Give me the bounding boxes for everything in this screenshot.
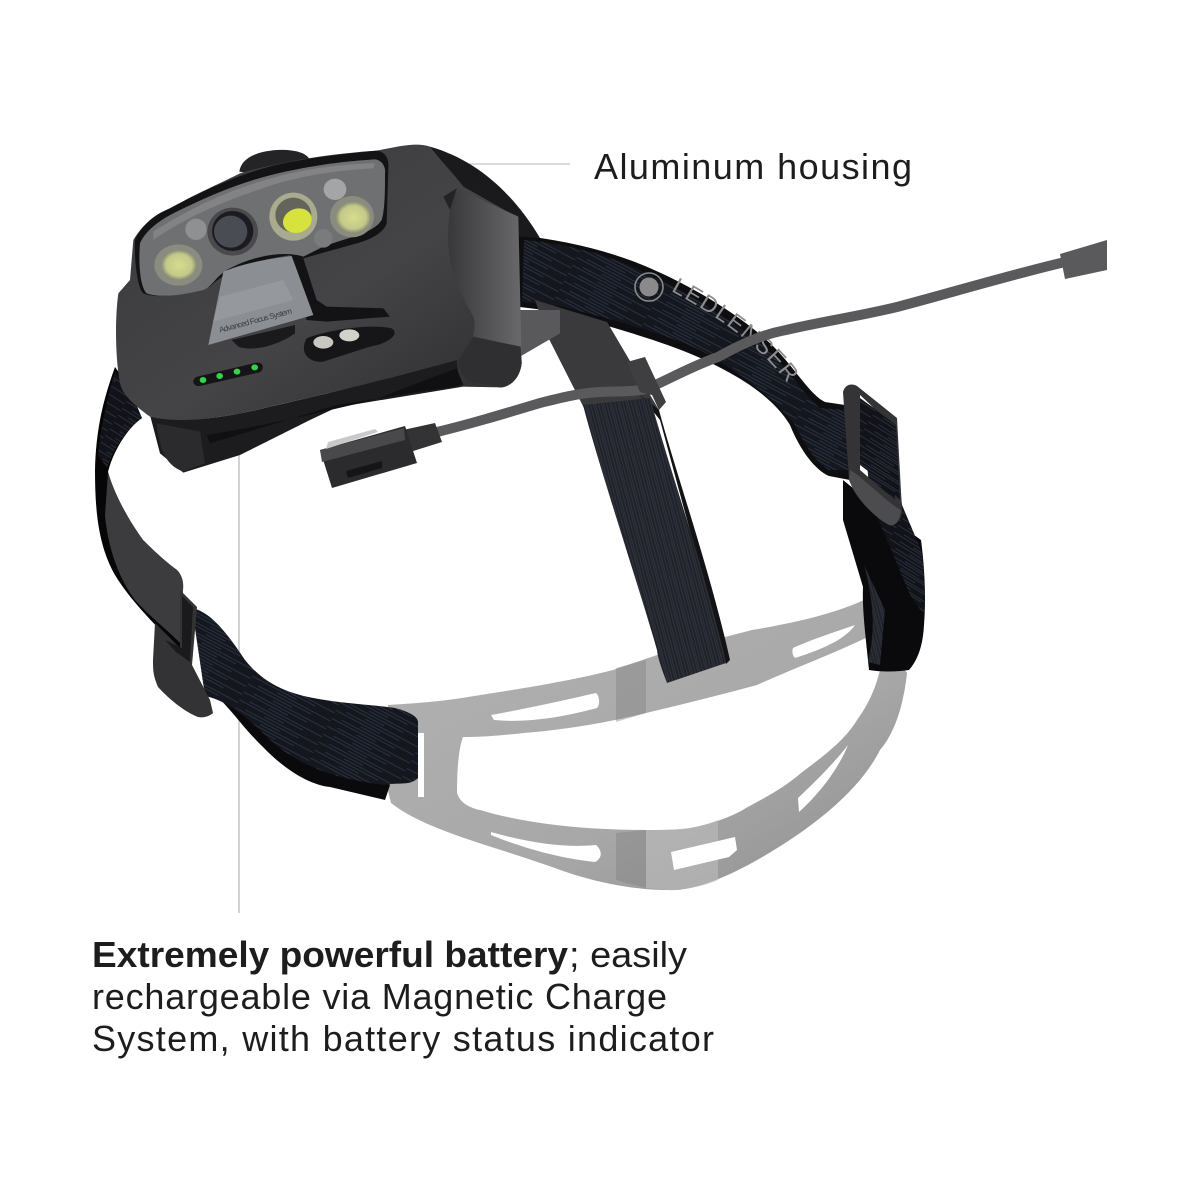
housing shell [116,145,522,420]
battery description text [92,934,714,1059]
switch panel [304,327,395,362]
cable strap slider [627,357,666,410]
focus wheel [232,325,295,349]
top knob [239,150,310,177]
small lens dots [185,219,207,240]
right side strap twist and buckle [843,384,925,672]
focus slider: Advanced Focus System [218,306,293,335]
left LED [154,244,202,286]
third line: System, with battery status indicator [92,1018,714,1059]
focus slider [208,256,313,345]
top strap [535,300,730,683]
right hinge [448,188,522,387]
leader line: aluminum housing [468,163,570,165]
charging cable [320,240,1107,488]
bracket face [157,423,205,472]
right strap buckle [843,384,902,525]
underside recess [207,368,463,443]
left strap buckle and lower band [153,590,418,800]
frame slots [418,625,855,870]
rear strap, right side with lettering [518,236,849,480]
lens window [139,159,385,296]
left side strap [95,367,183,650]
first line ending: ; easily [569,934,687,975]
hinge lower extension [510,310,560,357]
centre camera lens [207,208,258,256]
strap behind housing [430,147,540,238]
cable plug [1060,240,1107,279]
bold lead phrase: Extremely powerful battery [92,934,568,975]
lens glare band [153,163,375,240]
magnetic connector [320,423,442,488]
strap logo: LEDLENSER [672,278,798,382]
battery status LEDs [193,363,263,386]
main LED [269,193,317,241]
right LED [330,196,374,237]
housing underside bracket [150,357,463,473]
grey rear head frame [383,598,907,890]
label: aluminum housing: Aluminum housing [594,146,912,187]
lens window frame [135,151,390,322]
leader line: battery [238,455,240,913]
second line: rechargeable via Magnetic Charge [92,976,667,1017]
headlamp housing, drawn in 3x coordinates [116,145,560,473]
headlamp illustration [95,144,1107,890]
